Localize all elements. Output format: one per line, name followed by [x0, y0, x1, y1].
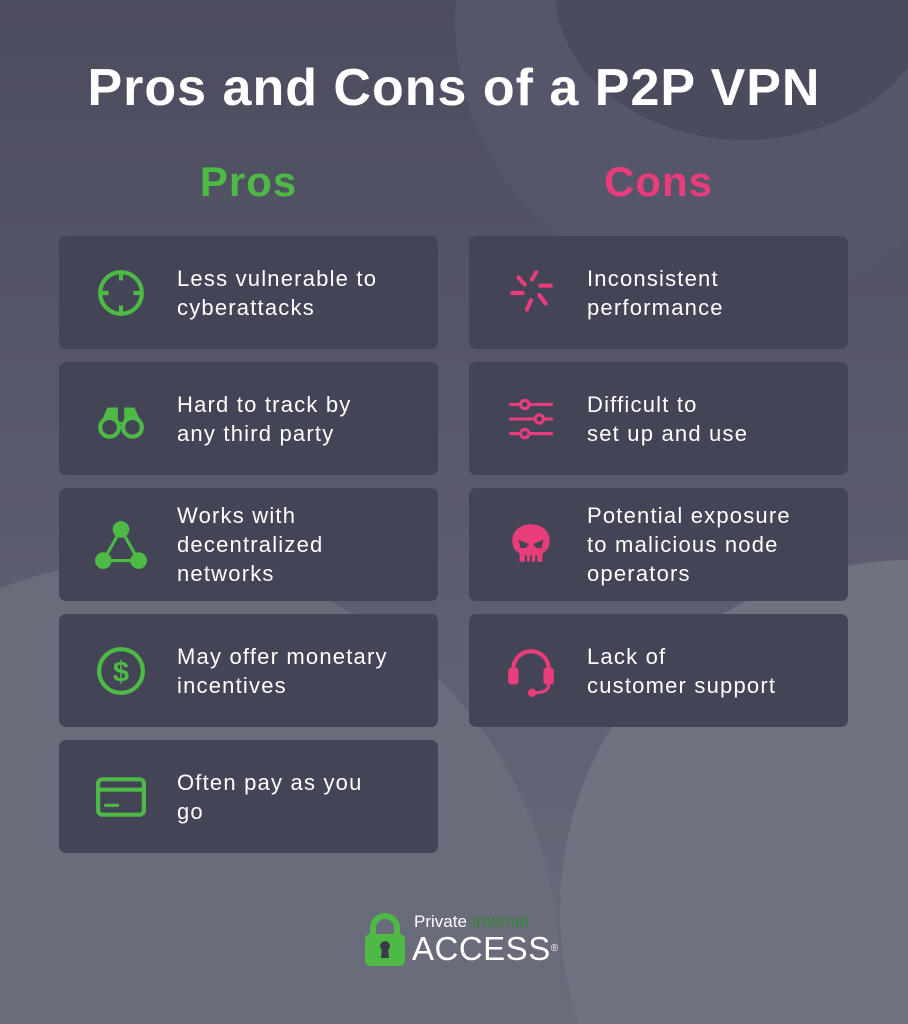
icon: dollar — [97, 647, 145, 695]
card: malicious: operators — [587, 561, 691, 586]
card: decentralized — [59, 488, 438, 601]
card: less vulnerable: cyberattacks — [177, 294, 315, 320]
logo: ACCESS® — [412, 930, 559, 967]
card: pay as you go: Often pay as you — [177, 770, 363, 794]
icon: network — [95, 521, 147, 569]
card: support: Lack of — [587, 644, 666, 668]
card: decentralized: networks — [177, 561, 275, 586]
title: Pros and Cons of a P2P VPN — [87, 59, 820, 117]
icon: sliders — [509, 398, 553, 440]
card: support: customer support — [587, 672, 776, 698]
card: monetary — [59, 614, 438, 727]
card: less vulnerable — [59, 236, 438, 349]
heading: cons: Cons — [604, 158, 713, 205]
card: malicious: to malicious node — [587, 532, 779, 557]
card: difficult — [469, 362, 848, 475]
card: hard to track — [59, 362, 438, 475]
card: decentralized: Works with — [177, 503, 296, 528]
card: inconsistent: Inconsistent — [587, 266, 719, 290]
icon: binoculars — [98, 408, 144, 439]
icon: dollar: $ — [113, 656, 129, 688]
card: pay as you go — [59, 740, 438, 853]
card: decentralized: decentralized — [177, 532, 323, 557]
icon: card — [96, 777, 146, 817]
card: malicious — [469, 488, 848, 601]
icon: skull — [512, 524, 550, 562]
logo: Private Internet — [414, 912, 529, 931]
card: difficult: Difficult to — [587, 392, 698, 416]
card: difficult: set up and use — [587, 420, 748, 446]
card: malicious: Potential exposure — [587, 503, 791, 528]
card: less vulnerable: Less vulnerable to — [177, 266, 377, 290]
logo — [365, 912, 559, 967]
card: pay as you go: go — [177, 798, 204, 824]
card: inconsistent — [469, 236, 848, 349]
heading: pros: Pros — [200, 158, 297, 205]
icon: crosshair — [98, 270, 144, 316]
card: hard to track: any third party — [177, 420, 334, 446]
icon: padlock — [365, 913, 405, 966]
card: monetary: incentives — [177, 672, 287, 698]
card: inconsistent: performance — [587, 294, 724, 320]
card: hard to track: Hard to track by — [177, 392, 351, 416]
card: support — [469, 614, 848, 727]
icon: spinner — [510, 270, 553, 312]
icon: headset — [508, 649, 554, 697]
card: monetary: May offer monetary — [177, 644, 388, 668]
